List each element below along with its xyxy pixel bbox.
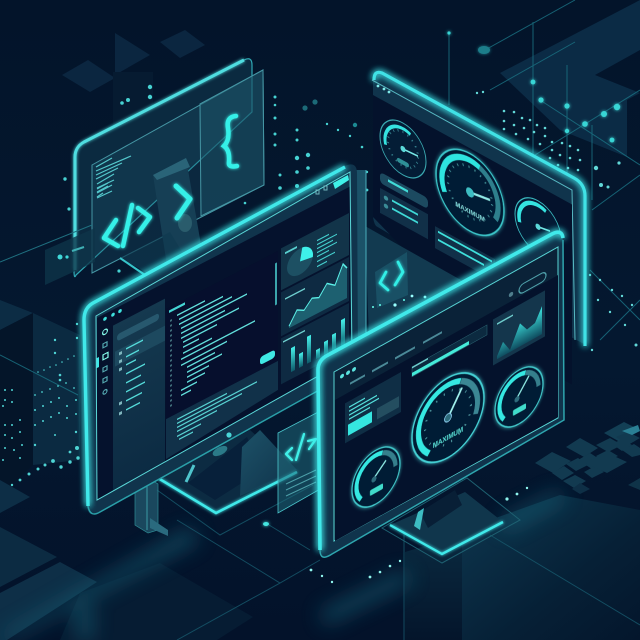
inner frame [96,172,352,500]
gauge left [349,431,403,523]
vertical bezel side [352,170,366,370]
code editor [166,251,278,419]
screen [96,186,351,501]
window dots [103,308,122,322]
gauge left [380,110,426,188]
dot field left [2,323,80,486]
gauge large MAXIMUM: MAXIMUM [433,426,463,450]
icon: chevron [176,186,190,218]
readout panel [435,226,495,281]
dot field top right [476,91,638,351]
monitor back panel [74,59,252,277]
gauge right [492,351,546,443]
code text lines [96,156,131,198]
dot field center [63,85,368,273]
glowing edge [374,72,585,346]
area chart panel [493,290,545,366]
console panel [166,348,278,459]
glowing edge [75,60,244,270]
gauge large MAXIMUM [433,129,507,255]
settings panel [380,188,428,239]
code overlay panel [278,410,322,513]
bezel [83,164,358,514]
progress bar [412,325,487,377]
small floating tab [0,225,95,285]
active marker [96,357,99,369]
pie panel [281,213,349,290]
monitor stand arm [120,158,205,285]
front monitor [318,232,564,557]
inner frame line [372,80,575,340]
screen [335,253,558,542]
inner frame [334,247,558,541]
line chart panel [281,257,349,336]
blurred light streaks [0,490,565,640]
small transparent tower [135,478,168,536]
icon: curly brace [224,116,237,166]
bezel [318,232,564,557]
camera dot [226,432,232,438]
glowing edge [84,167,345,506]
top-right monitor [372,72,586,384]
screen [373,95,572,384]
sidebar icons [103,328,108,395]
gauge right [515,188,561,266]
glass panel between monitors [352,170,500,370]
icon: code tag [104,205,150,246]
top-left glass monitor [74,59,264,285]
keyboard tiles [535,422,640,494]
form panel [345,372,401,443]
network nodes [447,31,620,142]
bar chart panel [281,303,349,384]
nav bar [340,260,546,395]
glowing edge [318,232,563,550]
window dots [377,85,390,93]
divider panel [200,70,264,216]
ground light node [263,522,269,526]
gauge large MAXIMUM: MAXIMUM [455,201,485,224]
floor dots [310,487,528,583]
glass pane [92,70,264,273]
front monitor stand [382,478,520,563]
main monitor stand [158,430,297,513]
status pill [380,172,428,209]
monitor bezel [373,72,586,345]
header controls [316,175,349,194]
main monitor [83,164,358,514]
icon: chevrons tile [375,252,408,308]
gauge large MAXIMUM [406,348,490,487]
sidebar panel [113,299,165,491]
